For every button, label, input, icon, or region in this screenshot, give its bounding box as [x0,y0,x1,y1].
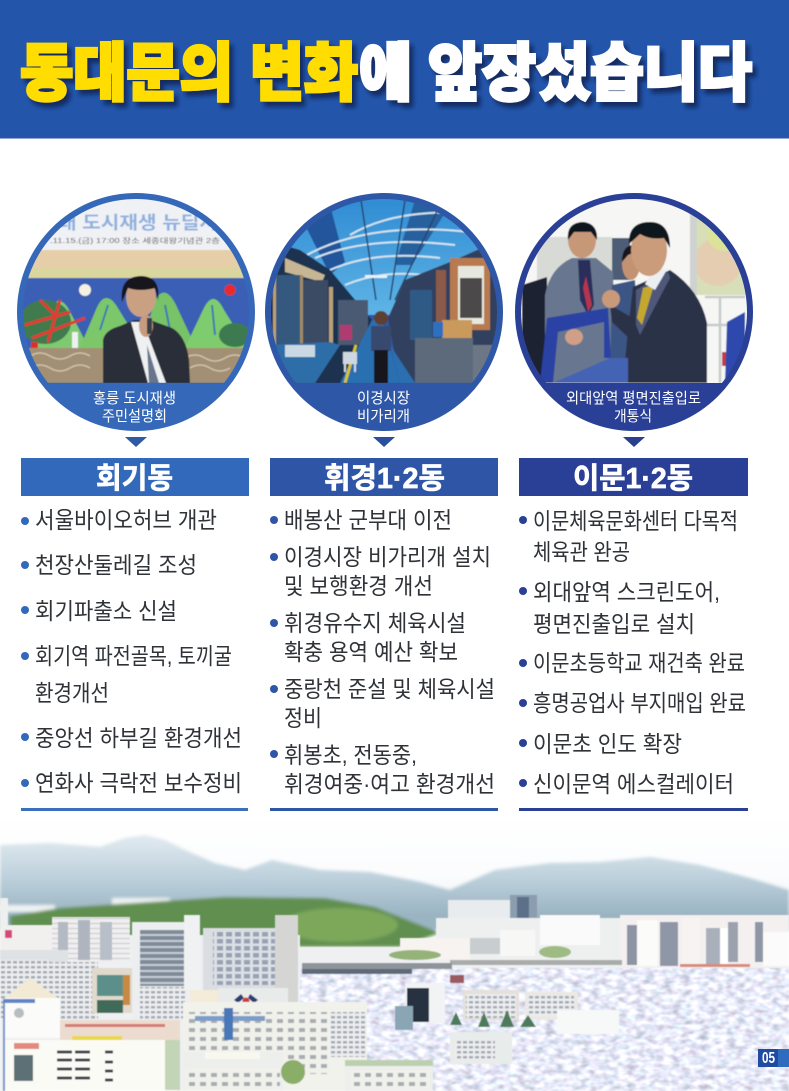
list: 회기동: 회기파출소 신설 [35,598,177,624]
list: 회기동: 회기역 파전골목, 토끼굴 [35,643,232,669]
panel: photo circle 2 [265,193,505,431]
photo: town meeting speaker: 대 도시재생 뉴딜사 [58,213,218,233]
title [20,39,752,109]
list: 이문1·2동: 평면진출입로 설치 [533,611,695,637]
heading: 회기동 [21,458,249,496]
page number [758,1049,789,1067]
photo: town meeting speaker [19,195,252,383]
arrow 3 [623,437,645,447]
list: 회기동: 연화사 극락전 보수정비 [35,770,242,796]
caption 2: 비가리개 [357,408,410,425]
heading: 휘경1·2동: 휘경1·2동 [324,462,445,495]
arrow 2 [373,437,395,447]
page number: 05 [762,1050,775,1067]
column: 휘경1·2동 [270,458,498,811]
list: 이문1·2동: 흥명공업사 부지매입 완료 [533,690,746,716]
list: 회기동 [21,507,242,796]
caption 1 [93,389,176,425]
list: 휘경1·2동: 중랑천 준설 및 체육시설 [284,676,495,702]
photo: station gate opening [515,195,755,385]
list: 이문1·2동: 외대앞역 스크린도어, [533,579,720,605]
heading: 이문1·2동 [519,458,748,496]
list: 휘경1·2동: 배봉산 군부대 이전 [284,507,452,533]
list: 이문1·2동 [519,508,746,797]
caption 2 [357,390,410,425]
photo: covered market street [265,195,505,383]
list: 휘경1·2동 [270,507,495,797]
title: 변화 [250,39,358,109]
caption 3 [566,390,701,425]
caption 3: 외대앞역 평면진출입로 [566,390,701,407]
title: 앞장섰습니다 [428,39,752,109]
caption 3: 개통식 [614,408,652,425]
caption 2: 이경시장 [357,390,410,407]
arrow 1 [125,437,147,447]
list: 회기동: 중앙선 하부길 환경개선 [35,725,242,751]
list: 회기동: 천장산둘레길 조성 [35,552,197,578]
list: 휘경1·2동: 확충 용역 예산 확보 [284,639,458,665]
heading: 이문1·2동: 이문1·2동 [573,462,693,495]
list: 회기동: 서울바이오허브 개관 [35,507,217,533]
title: 동대문의 [20,39,233,109]
title: 에 [359,39,412,109]
list: 휘경1·2동: 정비 [284,705,322,731]
photo: town meeting speaker: .11.15.(금) 17:00 장소 세종대왕기념관 2층 [50,236,221,245]
header band [0,0,789,138]
column: 이문1·2동 [519,458,748,811]
panel: photo circle 1 [17,193,255,431]
list: 이문1·2동: 이문체육문화센터 다목적 [533,508,738,534]
list: 휘경1·2동: 이경시장 비가리개 설치 [284,544,491,570]
list: 휘경1·2동: 휘경여중·여고 환경개선 [284,771,495,797]
list: 휘경1·2동: 휘봉초, 전동중, [284,742,417,768]
caption 1: 주민설명회 [102,408,167,425]
list: 휘경1·2동: 휘경유수지 체육시설 [284,610,466,636]
list: 이문1·2동: 이문초 인도 확장 [533,731,682,757]
caption 1: 홍릉 도시재생 [93,389,176,407]
list: 회기동: 환경개선 [35,680,109,706]
list: 이문1·2동: 체육관 완공 [533,539,630,565]
list: 이문1·2동: 신이문역 에스컬레이터 [533,771,734,797]
photo: city skyline [0,815,789,1091]
heading: 회기동: 회기동 [96,462,173,495]
list: 이문1·2동: 이문초등학교 재건축 완료 [533,650,745,676]
column: 회기동 [21,458,249,811]
heading: 휘경1·2동 [270,458,498,496]
list: 휘경1·2동: 및 보행환경 개선 [284,573,433,599]
panel: photo circle 3 [515,193,755,431]
